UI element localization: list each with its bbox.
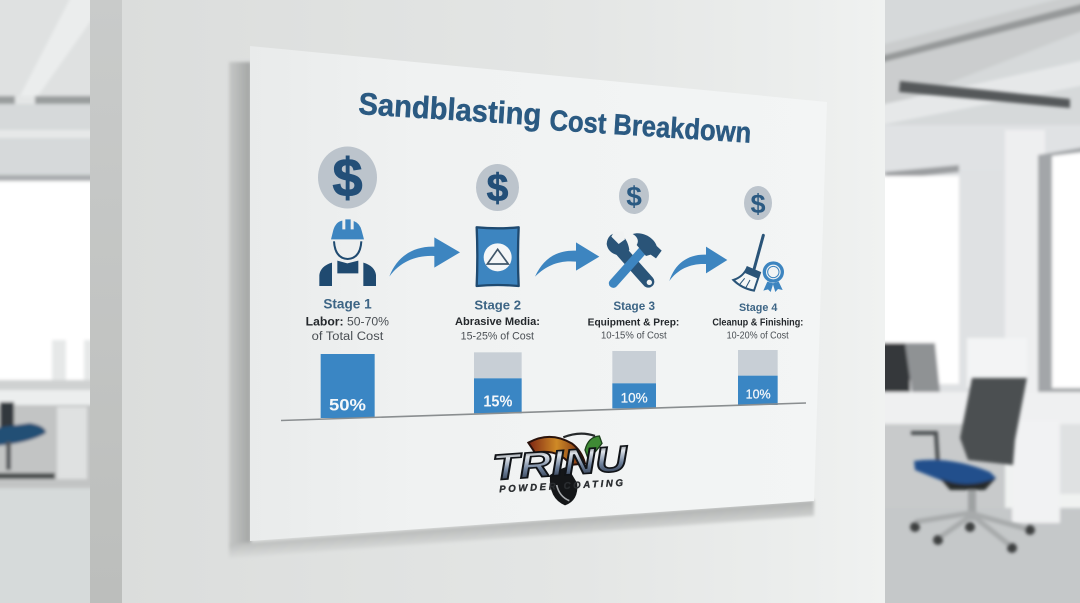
- icon: dollar coin 3: $: [626, 181, 642, 212]
- label: stage 4: Cleanup & Finishing:: [712, 317, 803, 328]
- poster shadow: [229, 62, 814, 558]
- bar: stage 4 10%: [738, 350, 778, 405]
- scenery: office chair: [910, 378, 1035, 553]
- icon: dollar coin 2: [476, 164, 519, 211]
- bar: stage 2 15%: [474, 352, 522, 413]
- icon: dollar coin 2: $: [487, 167, 509, 210]
- bar: stage 1 50%: 50%: [329, 396, 366, 415]
- label: stage 1: of Total Cost: [312, 329, 384, 343]
- label: stage 2: Abrasive Media:: [455, 316, 540, 328]
- label: stage 4: [712, 302, 803, 341]
- label: stage 4: 10-20% of Cost: [727, 330, 789, 341]
- arrow: stage 2 to 3: [535, 242, 599, 277]
- label: stage 4: Stage 4: [739, 302, 778, 314]
- title: Cost Breakdown: [549, 105, 752, 150]
- scenery: monitors: [885, 338, 1006, 394]
- title: Sandblasting: [358, 86, 542, 132]
- icon: dollar coin 1: [318, 146, 377, 208]
- label: stage 3: 10-15% of Cost: [601, 331, 667, 342]
- label: stage 3: [588, 299, 679, 342]
- icon: dollar coin 4: $: [750, 189, 766, 219]
- title: [358, 86, 752, 150]
- arrow: stage 1 to 2: [389, 237, 460, 277]
- background: right office view: [880, 0, 1080, 603]
- stage 1: labor: [306, 146, 389, 418]
- scenery: pendant lamp: [899, 81, 1070, 108]
- label: stage 2: [455, 297, 540, 342]
- bar: stage 1 50%: [321, 354, 375, 418]
- arrow: stage 3 to 4: [669, 247, 727, 281]
- background: wall column edge: [90, 0, 122, 603]
- label: stage 1: Stage 1: [323, 296, 372, 311]
- chart baseline: [281, 403, 806, 420]
- icon: crossed wrench and hammer: [607, 232, 662, 285]
- label: stage 3: Stage 3: [613, 299, 655, 313]
- stage 4: cleanup and finishing: [712, 186, 803, 405]
- bar: stage 3 10%: [612, 351, 656, 408]
- icon: abrasive media bag: [477, 227, 519, 286]
- label: stage 1: [306, 296, 389, 343]
- icon: dollar coin 3: [619, 178, 649, 214]
- label: stage 1: Labor: 50-70%: [306, 315, 389, 329]
- bar: stage 3 10%: 10%: [621, 389, 648, 405]
- icon: worker with hard hat: [319, 219, 376, 286]
- stage 2: abrasive media: [455, 164, 540, 413]
- background: left office view: [0, 0, 90, 490]
- bar: stage 2 15%: 15%: [483, 393, 513, 410]
- icon: dollar coin 4: [744, 186, 772, 220]
- label: stage 2: 15-25% of Cost: [461, 330, 534, 342]
- label: stage 2: Stage 2: [474, 297, 521, 312]
- label: stage 3: Equipment & Prep:: [588, 318, 679, 329]
- logo: Trinu Powder Coating: TRINU: [491, 438, 630, 488]
- icon: broom and rosette: [733, 235, 784, 292]
- logo: Trinu Powder Coating: POWDER COATING: [499, 478, 624, 495]
- poster: infographic board: [250, 46, 827, 541]
- logo: Trinu Powder Coating: [491, 434, 630, 505]
- stage 3: equipment and prep: [588, 178, 679, 408]
- bar: stage 4 10%: 10%: [746, 387, 771, 402]
- icon: dollar coin 1: $: [332, 148, 363, 208]
